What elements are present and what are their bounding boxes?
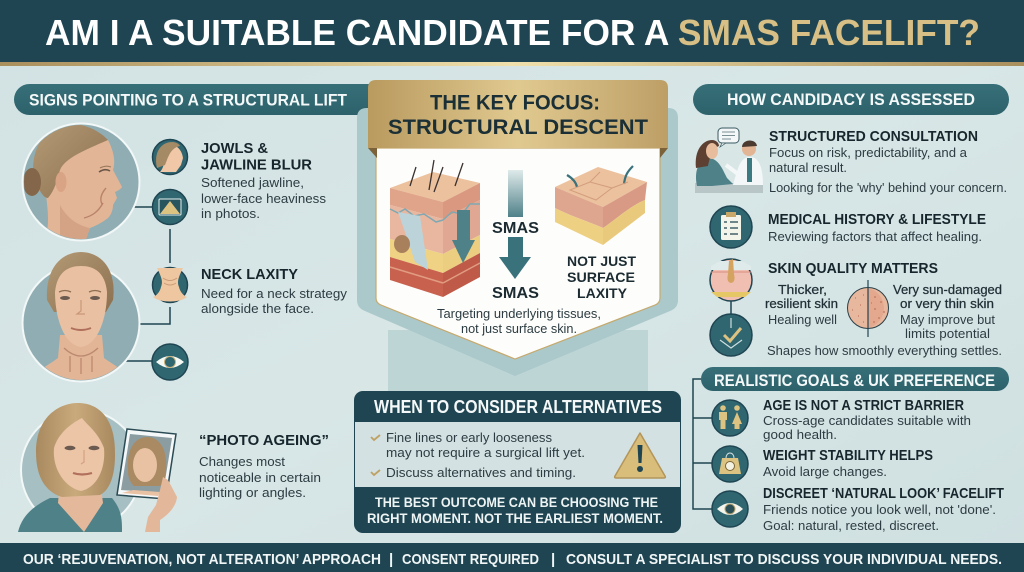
footer banner: OUR ‘REJUVENATION, NOT ALTERATION’ APPROACH bbox=[23, 551, 381, 568]
illustration: surface laxity block: SURFACE bbox=[567, 269, 635, 285]
text block: natural look: Goal: natural, rested, discreet. bbox=[763, 518, 939, 533]
text block: medical history: MEDICAL HISTORY & LIFESTYLE bbox=[768, 211, 986, 228]
portrait: profile face bbox=[22, 124, 140, 245]
icon: neck bbox=[152, 268, 188, 302]
arrow: descent with SMAS labels: SMAS bbox=[492, 220, 539, 237]
illustration: consultation bbox=[695, 128, 763, 193]
takeaway: RIGHT MOMENT. NOT THE EARLIEST MOMENT. bbox=[367, 511, 663, 526]
checklist: may not require a surgical lift yet. bbox=[386, 445, 585, 460]
portrait: frontal face with neck laxity bbox=[22, 252, 140, 385]
text block: age: good health. bbox=[763, 427, 837, 442]
text block: structured consultation: Looking for the 'why' behind your concern. bbox=[769, 180, 1007, 195]
text block: weight stability: WEIGHT STABILITY HELPS bbox=[763, 447, 933, 464]
heading pill: candidacy: HOW CANDIDACY IS ASSESSED bbox=[727, 90, 975, 109]
checklist bbox=[371, 430, 585, 480]
panel: signs pointing to a structural lift bbox=[14, 84, 384, 532]
heading pill: signs bbox=[14, 84, 384, 115]
text block: structured consultation bbox=[769, 128, 1007, 195]
footer banner: | bbox=[389, 551, 393, 568]
text block: age bbox=[763, 397, 971, 442]
skin damaged text: Very sun-damaged bbox=[893, 282, 1002, 297]
caption: targeting tissues: not just surface skin. bbox=[461, 321, 577, 336]
illustration: surface laxity block: LAXITY bbox=[577, 285, 628, 301]
gold ribbon heading: THE KEY FOCUS: bbox=[430, 92, 600, 114]
icon: clipboard bbox=[710, 206, 752, 248]
bracket lines bbox=[693, 379, 712, 509]
skin damaged text: limits potential bbox=[905, 326, 990, 341]
footer banner: | bbox=[551, 551, 555, 568]
portrait: photo ageing woman with photo bbox=[18, 403, 177, 532]
footer banner bbox=[0, 543, 1024, 572]
icon: eye bbox=[152, 344, 188, 380]
icon: warning triangle bbox=[615, 433, 665, 478]
white shield bbox=[376, 148, 660, 359]
footer banner: CONSULT A SPECIALIST TO DISCUSS YOUR INDIVIDUAL NEEDS. bbox=[566, 551, 1002, 568]
text block: structured consultation: Focus on risk, predictability, and a bbox=[769, 145, 968, 160]
text block: neck laxity: Need for a neck strategy bbox=[201, 286, 348, 301]
text block: photo ageing: noticeable in certain bbox=[199, 470, 321, 485]
connector: skin to check bbox=[730, 301, 732, 314]
skin good text: Healing well bbox=[768, 312, 837, 327]
text block: skin quality matters: SKIN QUALITY MATTERS bbox=[768, 260, 938, 277]
text block: medical history bbox=[768, 211, 986, 244]
footer banner: CONSENT REQUIRED bbox=[402, 551, 539, 568]
icon: skin follicle bbox=[710, 259, 752, 301]
arrow: descent with SMAS labels bbox=[492, 170, 539, 302]
illustration: surface laxity block: NOT JUST bbox=[567, 253, 636, 269]
text block: jowls and jawline blur: JAWLINE BLUR bbox=[201, 156, 312, 174]
skin damaged text: or very thin skin bbox=[900, 296, 994, 311]
panel: when to consider alternatives bbox=[354, 391, 681, 533]
skin comparison circle bbox=[848, 280, 888, 337]
header banner bbox=[0, 0, 1024, 66]
text block: skin quality matters bbox=[765, 260, 1002, 358]
gold ribbon heading bbox=[368, 80, 668, 158]
text block: weight stability bbox=[763, 447, 933, 479]
text block: weight stability: Avoid large changes. bbox=[763, 464, 887, 479]
takeaway bbox=[367, 495, 663, 526]
text block: natural look bbox=[763, 485, 1004, 533]
connector lines bbox=[103, 205, 170, 363]
text block: jowls and jawline blur: lower-face heaviness bbox=[201, 191, 327, 206]
text block: natural look: Friends notice you look well, not 'done'. bbox=[763, 502, 996, 517]
checklist: Discuss alternatives and timing. bbox=[386, 465, 576, 480]
illustration: skin cross section with SMAS bbox=[390, 160, 480, 297]
checklist: Fine lines or early looseness bbox=[386, 430, 553, 445]
icon: two people bbox=[712, 400, 748, 436]
caption: targeting tissues bbox=[437, 306, 601, 336]
text block: jowls and jawline blur: Softened jawline, bbox=[201, 175, 304, 190]
text block: photo ageing: lighting or angles. bbox=[199, 485, 306, 500]
skin good text: Thicker, bbox=[778, 282, 827, 297]
text block: neck laxity: NECK LAXITY bbox=[201, 266, 298, 283]
photo held in hand bbox=[117, 429, 177, 532]
text block: structured consultation: STRUCTURED CONSULTATION bbox=[769, 128, 978, 145]
skin damaged text bbox=[893, 282, 1002, 341]
skin good text bbox=[765, 282, 838, 327]
skin damaged text: May improve but bbox=[900, 312, 995, 327]
icon: check mark bbox=[710, 314, 752, 356]
text block: structured consultation: natural result. bbox=[769, 160, 847, 175]
icon: weight bbox=[712, 446, 748, 482]
text block: age: AGE IS NOT A STRICT BARRIER bbox=[763, 397, 964, 414]
icon: photo frame bbox=[152, 190, 188, 224]
text block: photo ageing: “PHOTO AGEING” bbox=[199, 432, 329, 449]
heading: alternatives: WHEN TO CONSIDER ALTERNATIVES bbox=[374, 397, 662, 417]
text block: jowls and jawline blur bbox=[201, 140, 327, 221]
icon: profile head bbox=[152, 140, 188, 174]
text block: neck laxity: alongside the face. bbox=[201, 301, 314, 316]
panel: how candidacy is assessed bbox=[693, 84, 1009, 358]
gold ribbon heading: STRUCTURAL DESCENT bbox=[388, 116, 648, 139]
panel: key focus structural descent bbox=[357, 80, 678, 392]
text block: age: Cross-age candidates suitable with bbox=[763, 413, 971, 428]
text block: photo ageing bbox=[199, 432, 329, 500]
panel: realistic goals and UK preference bbox=[693, 367, 1009, 533]
skin good text: resilient skin bbox=[765, 296, 838, 311]
text block: jowls and jawline blur: in photos. bbox=[201, 206, 260, 221]
heading pill: candidacy bbox=[693, 84, 1009, 115]
text block: neck laxity bbox=[201, 266, 348, 316]
caption: targeting tissues: Targeting underlying tissues, bbox=[437, 306, 601, 321]
text block: skin quality matters: Shapes how smoothly everything settles. bbox=[767, 343, 1002, 358]
arrow: descent with SMAS labels: SMAS bbox=[492, 285, 539, 302]
text block: medical history: Reviewing factors that affect healing. bbox=[768, 229, 982, 244]
backdrop shapes bbox=[357, 108, 678, 392]
icon: eye bbox=[712, 491, 748, 527]
text block: photo ageing: Changes most bbox=[199, 454, 285, 469]
text block: jowls and jawline blur: JOWLS & bbox=[201, 140, 268, 157]
heading pill: signs: SIGNS POINTING TO A STRUCTURAL LIFT bbox=[29, 90, 348, 110]
takeaway: THE BEST OUTCOME CAN BE CHOOSING THE bbox=[375, 495, 658, 510]
illustration: surface laxity block bbox=[555, 166, 647, 301]
title: AM I A SUITABLE CANDIDATE FOR A SMAS FACELIFT? bbox=[45, 12, 980, 53]
